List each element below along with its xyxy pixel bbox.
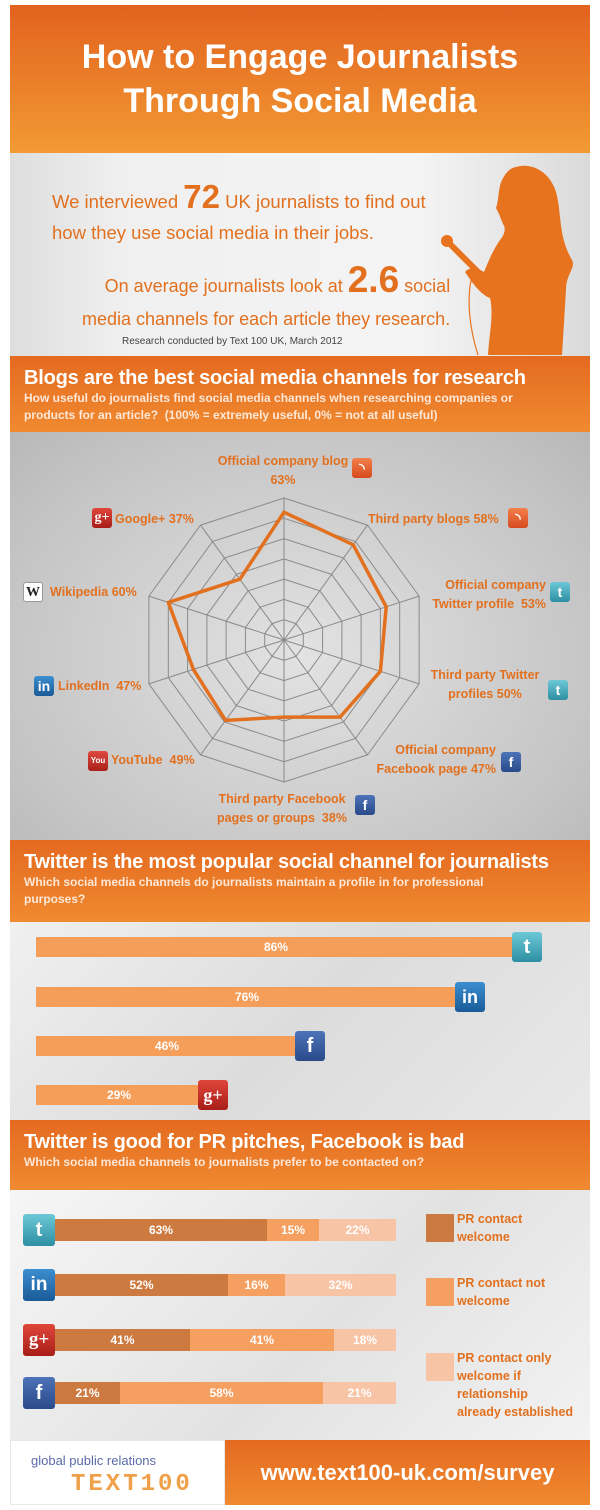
label: official facebook: Facebook page 47%	[376, 762, 496, 776]
footer logo: TEXT100	[71, 1471, 193, 1498]
legend	[426, 1212, 573, 1419]
icon: linkedin bar: in	[462, 987, 478, 1007]
label: wikipedia: Wikipedia 60%	[50, 585, 137, 599]
row: facebook: 21%	[75, 1386, 100, 1400]
label: official facebook	[376, 743, 496, 776]
icon: rss 2	[508, 508, 528, 528]
icon: rss: ◝	[359, 460, 365, 476]
intro text 2	[82, 259, 450, 329]
icon: twitter	[550, 582, 570, 602]
row: facebook: 21%	[347, 1386, 372, 1400]
header: PR pitches	[10, 1120, 590, 1190]
header: blogs: Blogs are the best social media channels for research	[24, 367, 526, 389]
row: facebook: f	[36, 1382, 42, 1404]
icon: facebook 2	[355, 795, 375, 815]
icon: wikipedia	[23, 582, 43, 602]
row: google+	[23, 1324, 396, 1356]
bar: facebook 46%: 46%	[155, 1039, 179, 1053]
header: twitter popular: Which social media channels do journalists maintain a profile in for professional	[24, 875, 483, 889]
row: facebook	[23, 1377, 396, 1409]
row: linkedin: 16%	[244, 1278, 269, 1292]
label: youtube: YouTube 49%	[111, 753, 195, 767]
intro text 1: how they use social media in their jobs.	[52, 222, 374, 243]
silhouette journalist	[441, 166, 573, 356]
legend: PR contact only	[457, 1351, 551, 1365]
intro text 1: We interviewed 72 UK journalists to find out	[52, 178, 426, 215]
label: third party blogs: Third party blogs 58%	[368, 512, 499, 526]
icon: youtube	[88, 751, 108, 771]
bar: google+ 29%: 29%	[107, 1088, 131, 1102]
label: third party twitter	[430, 668, 540, 701]
icon: twitter bar	[512, 932, 542, 962]
label: third party twitter: Third party Twitter	[431, 668, 539, 682]
icon: linkedin bar	[455, 982, 485, 1012]
header: PR pitches: Which social media channels to journalists prefer to be contacted on?	[24, 1155, 424, 1169]
row: google+: 18%	[353, 1333, 377, 1347]
panel: radar chart	[10, 432, 590, 840]
row: linkedin: in	[31, 1274, 47, 1295]
panel: stacked bar chart	[10, 1190, 590, 1440]
icon: twitter bar: t	[524, 936, 530, 958]
icon: facebook bar: f	[307, 1035, 313, 1057]
bar: linkedin 76%	[36, 987, 458, 1007]
intro text 2: media channels for each article they research.	[82, 309, 450, 329]
header: blogs	[10, 356, 590, 432]
label: google+: Google+ 37%	[115, 512, 194, 526]
label: official blog: Official company blog	[218, 454, 348, 468]
research credit: Research conducted by Text 100 UK, March 2012	[122, 336, 342, 347]
legend: welcome if	[457, 1369, 521, 1383]
header: blogs: How useful do journalists find social media channels when researching companies or	[24, 391, 513, 405]
icon: youtube: You	[91, 756, 105, 765]
bar: google+ 29%	[36, 1085, 202, 1105]
icon: facebook bar	[295, 1031, 325, 1061]
icon: wikipedia: W	[26, 585, 40, 600]
footer url: www.text100-uk.com/survey	[261, 1460, 554, 1485]
bar: twitter 86%: 86%	[264, 940, 288, 954]
label: official twitter: Twitter profile 53%	[432, 597, 546, 611]
title banner: Through Social Media	[123, 82, 477, 120]
icon: google+: g+	[94, 510, 109, 525]
intro panel	[10, 153, 590, 356]
icon: rss 2: ◝	[515, 510, 521, 526]
row: google+: g+	[29, 1329, 49, 1350]
icon: facebook	[501, 752, 521, 772]
header: twitter popular: Twitter is the most popular social channel for journalists	[24, 851, 549, 873]
row: twitter: 15%	[281, 1223, 305, 1237]
title banner: How to Engage Journalists	[82, 38, 518, 76]
header: twitter popular	[10, 840, 590, 922]
legend: relationship	[457, 1387, 528, 1401]
icon: linkedin	[34, 676, 54, 696]
label: third party facebook	[217, 792, 347, 825]
row: linkedin: 52%	[129, 1278, 154, 1292]
icon: google+	[92, 508, 112, 528]
icon: twitter 2: t	[556, 682, 560, 698]
label: official blog: 63%	[270, 473, 296, 487]
row: twitter: 22%	[345, 1223, 370, 1237]
footer logo: global public relations	[31, 1453, 156, 1468]
panel: profile bar chart	[10, 922, 590, 1120]
row: twitter: 63%	[149, 1223, 173, 1237]
bar: facebook 46%	[36, 1036, 298, 1056]
row: linkedin	[23, 1269, 396, 1301]
row: twitter: t	[36, 1219, 42, 1241]
icon: google+ bar	[198, 1080, 228, 1110]
row: twitter	[23, 1214, 396, 1246]
legend: welcome	[457, 1230, 510, 1244]
icon: rss	[352, 458, 372, 478]
header: blogs: products for an article? (100% = extremely useful, 0% = not at all useful)	[24, 408, 437, 422]
bar: twitter 86%	[36, 937, 516, 957]
legend: PR contact	[457, 1212, 522, 1226]
radar chart	[148, 498, 420, 782]
bar: linkedin 76%: 76%	[235, 990, 259, 1004]
row: facebook: 58%	[209, 1386, 234, 1400]
icon: facebook 2: f	[363, 797, 367, 813]
label: official twitter: Official company	[445, 578, 546, 592]
label: official blog	[218, 454, 348, 487]
label: third party facebook: pages or groups 38%	[217, 811, 347, 825]
label: official facebook: Official company	[395, 743, 496, 757]
icon: facebook: f	[509, 754, 513, 770]
row: google+: 41%	[250, 1333, 274, 1347]
title banner	[10, 5, 590, 153]
label: linkedin: LinkedIn 47%	[58, 679, 141, 693]
header: twitter popular: purposes?	[24, 892, 85, 906]
legend: already established	[457, 1405, 573, 1419]
footer logo	[10, 1440, 225, 1505]
icon: linkedin: in	[38, 678, 50, 694]
row: linkedin: 32%	[328, 1278, 353, 1292]
row: google+: 41%	[110, 1333, 135, 1347]
icon: google+ bar: g+	[203, 1085, 223, 1105]
label: third party twitter: profiles 50%	[448, 687, 522, 701]
header: PR pitches: Twitter is good for PR pitches, Facebook is bad	[24, 1131, 464, 1153]
legend: PR contact not	[457, 1276, 545, 1290]
legend: welcome	[457, 1294, 510, 1308]
footer url	[225, 1440, 590, 1505]
intro text 2: On average journalists look at 2.6 social	[105, 259, 450, 300]
label: third party facebook: Third party Facebook	[218, 792, 346, 806]
intro text 1	[52, 178, 426, 243]
icon: twitter 2	[548, 680, 568, 700]
label: official twitter	[432, 578, 546, 611]
icon: twitter: t	[558, 584, 562, 600]
radar labels	[23, 454, 570, 825]
